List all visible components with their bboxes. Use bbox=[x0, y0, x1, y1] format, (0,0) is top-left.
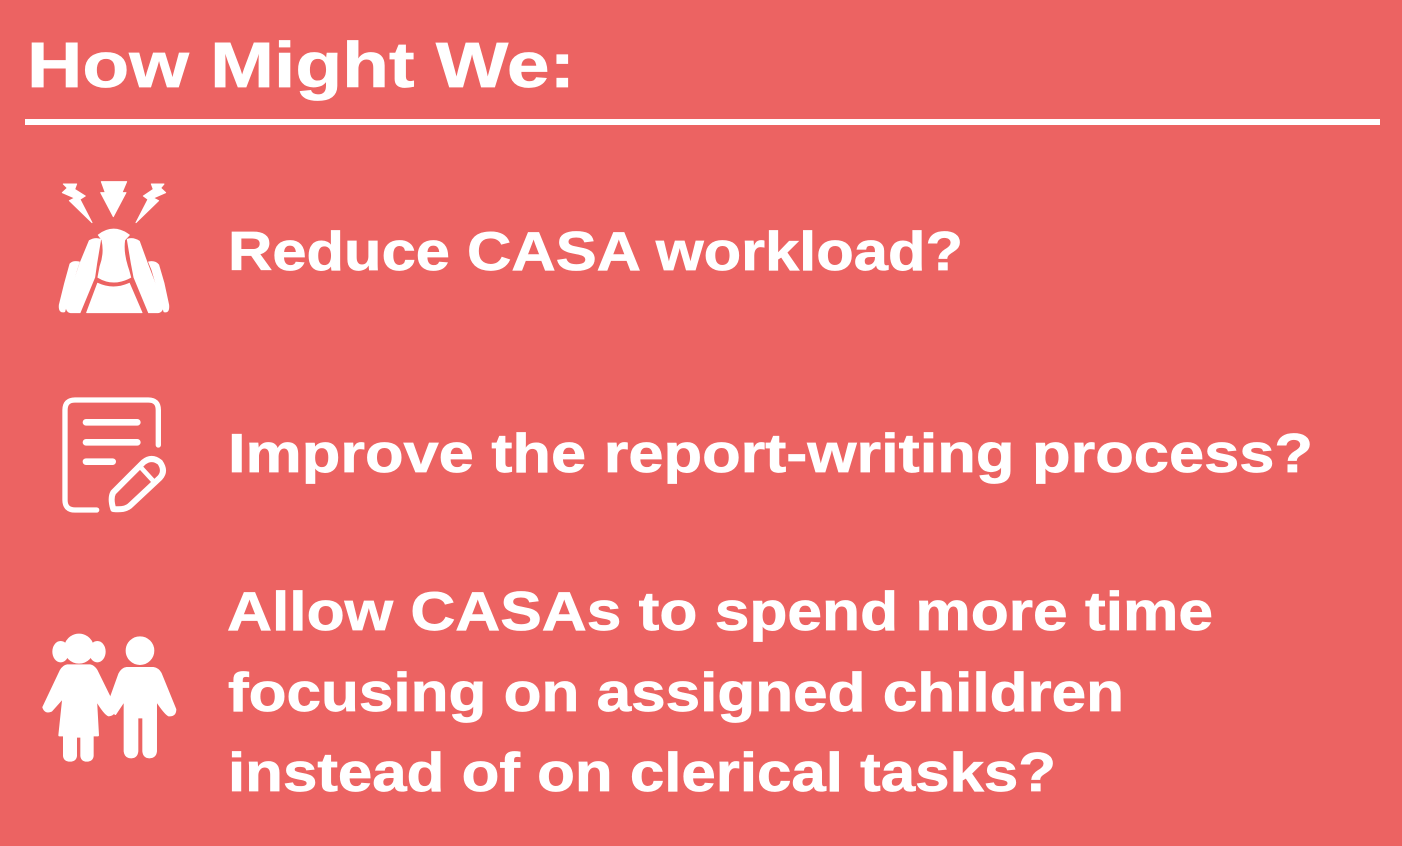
item text: reduce workload: Reduce CASA workload? bbox=[228, 220, 963, 282]
title: How Might We: bbox=[27, 29, 575, 101]
icon: report with pencil bbox=[65, 400, 163, 510]
icon: two children holding hands bbox=[43, 635, 175, 761]
item text: report writing: Improve the report-writing process? bbox=[228, 422, 1313, 484]
item text: focus on children bbox=[227, 580, 1213, 803]
item text: focus on children: instead of on clerical tasks? bbox=[228, 741, 1056, 803]
icon: stressed person with lightning bolts bbox=[59, 182, 169, 313]
item text: focus on children: Allow CASAs to spend more time bbox=[227, 580, 1213, 642]
item text: focus on children: focusing on assigned children bbox=[228, 661, 1124, 723]
